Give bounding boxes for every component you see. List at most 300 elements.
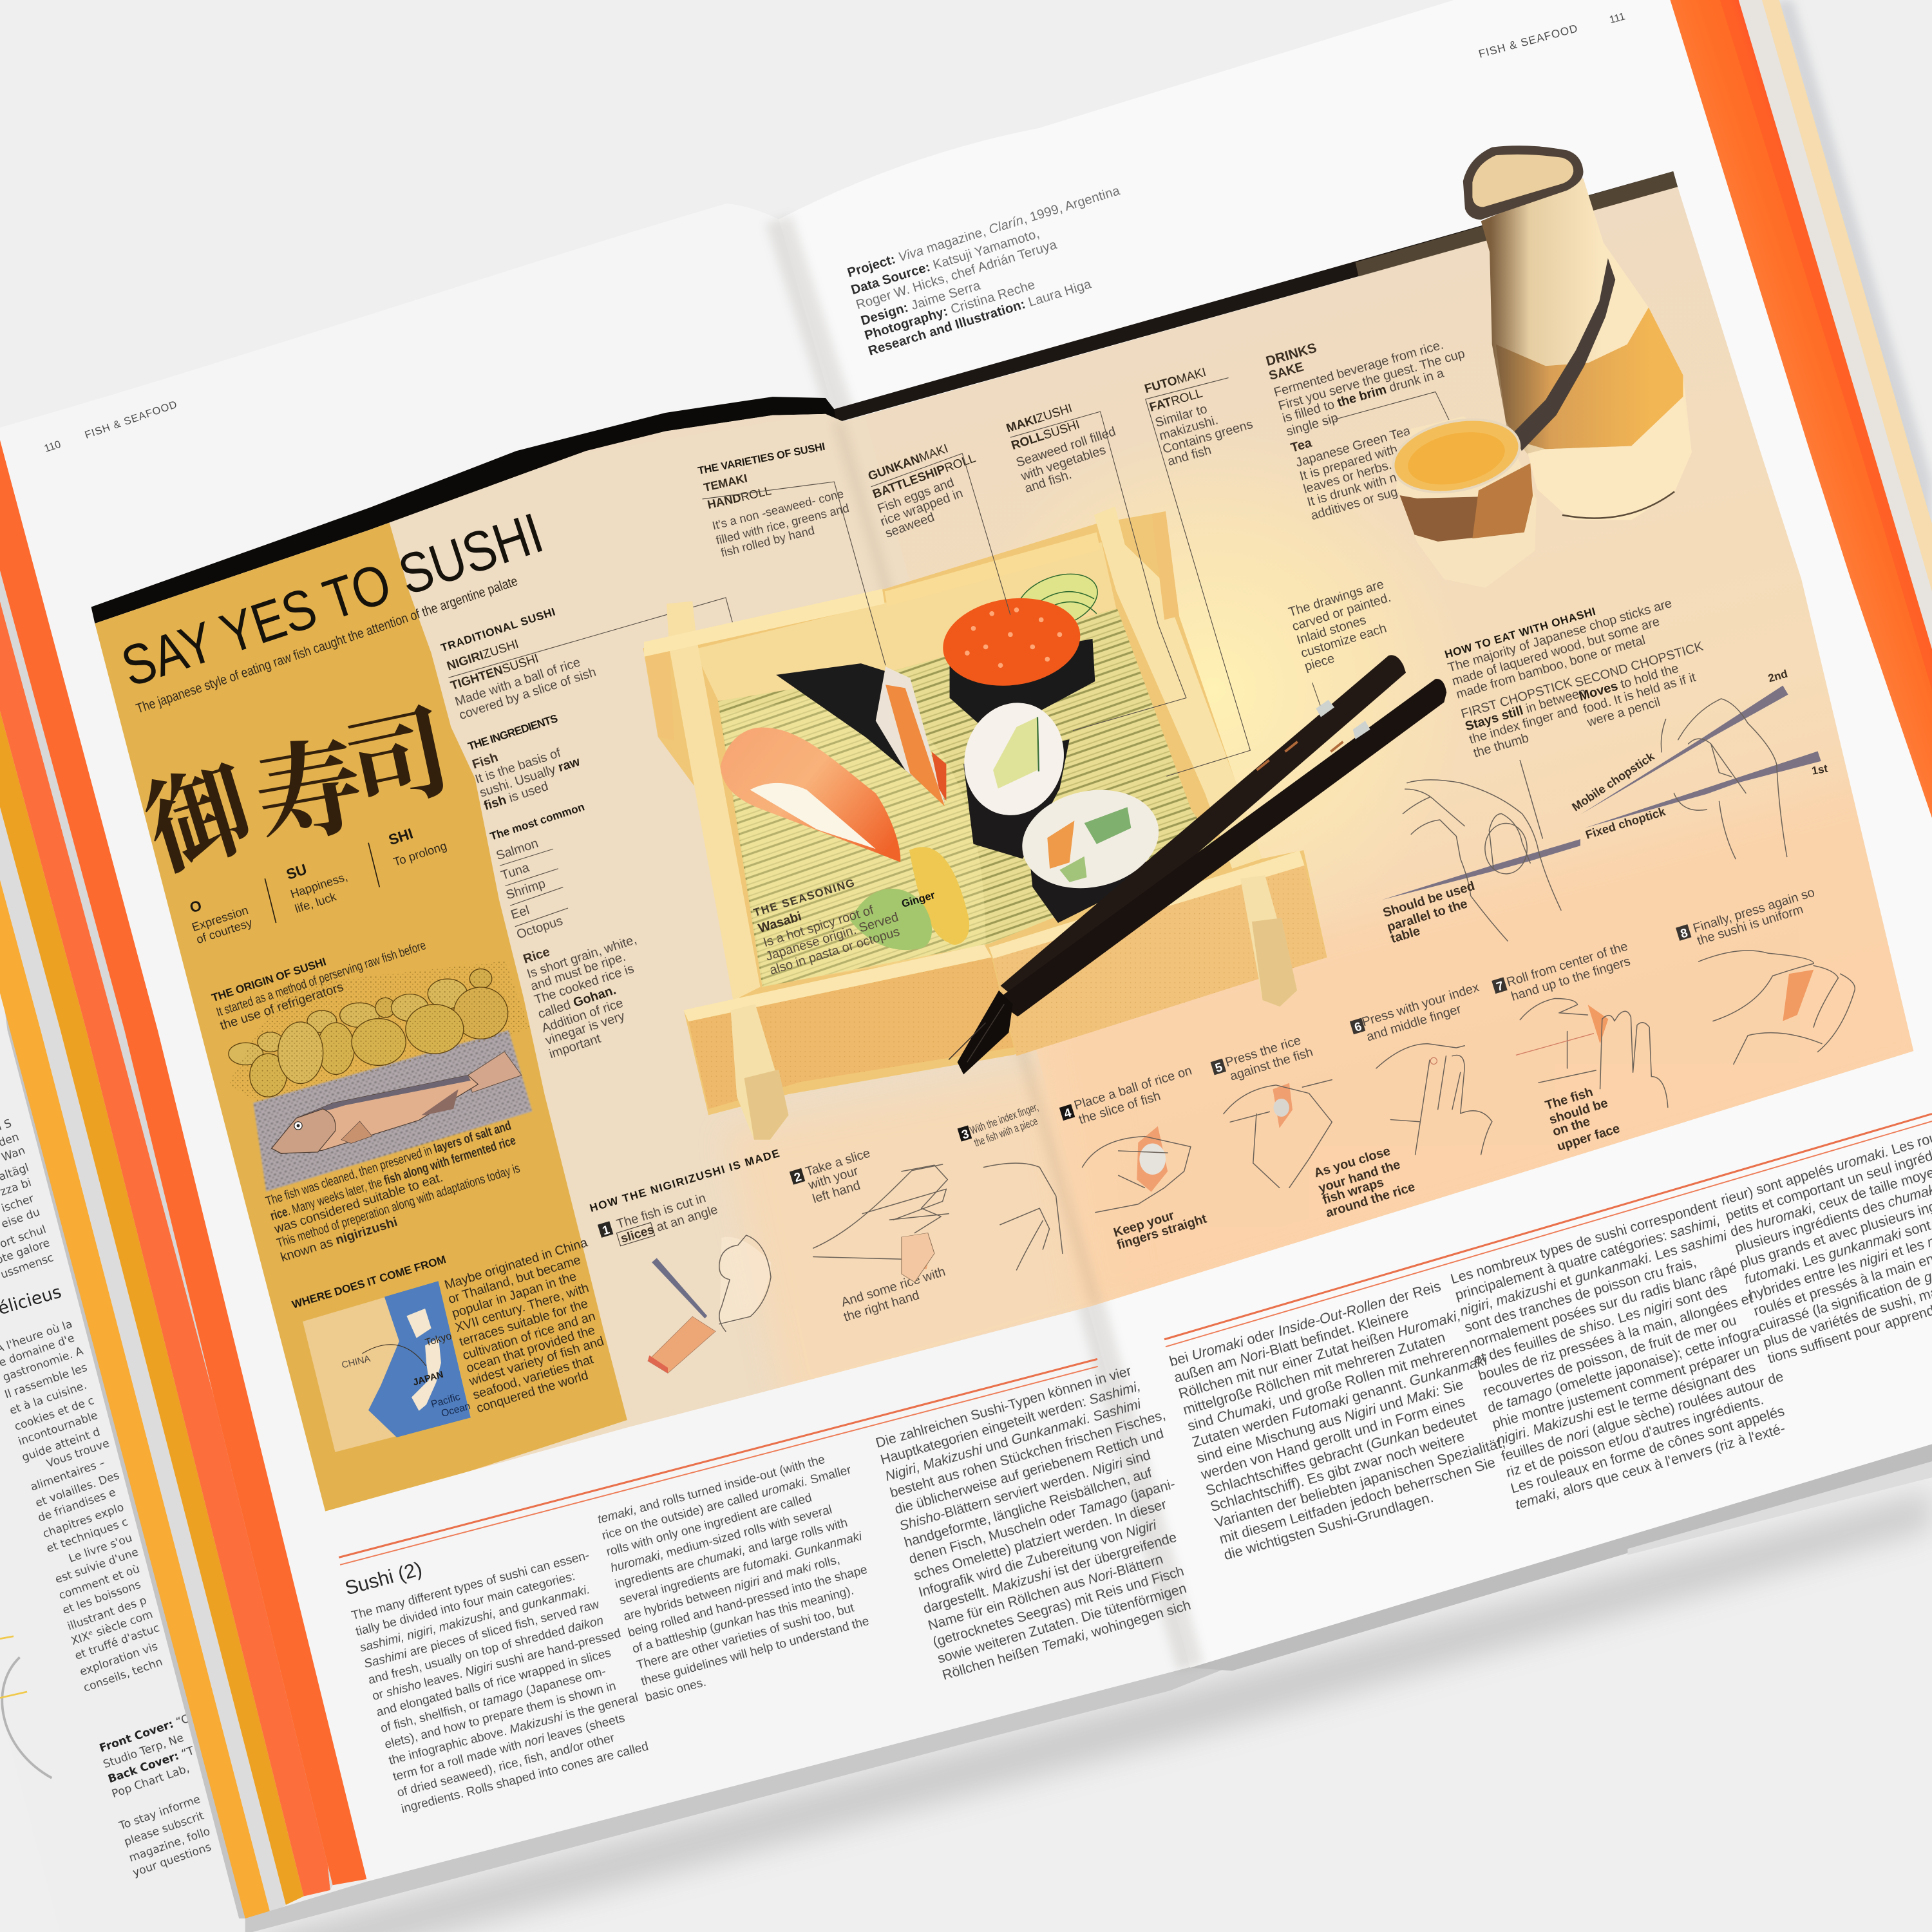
infographic photo background [95,187,1914,1511]
fish preservation paragraph [264,1119,522,1265]
map of Japan [303,1281,471,1452]
gunkan maki with roe [937,564,1105,724]
how to eat with ohashi text: SECOND CHOPSTICK [1573,639,1705,690]
German text column 1: Die zahlreichen Sushi-Typen können in vier [874,1363,1133,1451]
futomaki: Contains greens [1161,417,1255,457]
step 7: upper face [1555,1121,1622,1154]
label O: Expression [190,903,250,934]
underlying page body text: cookies et de c [13,1394,96,1434]
English text column 2: rolls with only one ingredient are called [605,1491,813,1559]
how to eat with ohashi text: the index finger and [1468,702,1580,747]
step 7: The fish [1544,1085,1595,1113]
chopstick labels: parallel to the [1385,896,1469,934]
underlying page top paragraph fragment: ischer [0,1192,36,1215]
German text column 2: Schlachtschiffes gebracht (Gunkan bedeutet [1204,1407,1479,1499]
how to eat with ohashi text: The majority of Japanese chop sticks are [1446,596,1674,675]
kanji SU: 寿 [243,700,374,868]
ingredients column: THE INGREDIENTS [466,712,559,753]
underlying page body text: gastronomie. A [1,1345,85,1384]
right book page [779,0,1932,1668]
step 4: the slice of fish [1077,1089,1162,1127]
fish preservation paragraph: rice. Many weeks later, the fish along with fermented rice [269,1133,518,1224]
underlying page body text: XIXᵉ siècle com [70,1608,155,1648]
origin paragraph: popular in Japan in the [450,1269,578,1321]
kanji O: 御 [126,724,268,897]
step 2: with your [806,1164,860,1193]
chopsticks note [1287,577,1393,707]
tray base [643,511,1327,1115]
English text column 1: ingredients. Rolls shaped into cones are called [400,1739,650,1816]
step 5: As you close [1312,1144,1392,1180]
origin of sushi heading and intro: It started as a method of perserving raw fish before [214,938,428,1019]
fish preservation paragraph: This method of preperation along with adaptations today is [275,1161,522,1251]
futomaki [1143,366,1255,776]
how to eat with ohashi text [1443,596,1705,761]
project credits: Data Source: Katsuji Yamamoto, [849,227,1041,298]
origin paragraph [443,1235,605,1416]
underlying page body text: conseils, techn [82,1656,164,1695]
underlying page top paragraph fragment: eise du [0,1206,42,1231]
chopstick labels: 2nd [1766,667,1789,685]
traditional sushi column: TIGHTENSUSHI [449,652,540,693]
French text column 1: temaki, alors que ceux à l'envers (riz à l'exté- [1513,1420,1787,1513]
gunkanmaki: BATTLESHIPROLL [871,451,978,502]
right page double rule [1164,1114,1932,1347]
label SHI: SHI [386,825,415,848]
sushi tray photo [643,506,1327,1140]
German text column 2: sind Chumaki, und große Rollen mit mehreren [1186,1340,1472,1434]
where does it come from heading: WHERE DOES IT COME FROM [290,1253,448,1311]
step 5: fish wraps [1321,1175,1385,1208]
gunkanmaki: Fish eggs and [876,475,956,516]
futomaki: makizushi. [1158,413,1220,443]
underlying page body text: guide atteint d [20,1426,102,1464]
step 3 [902,1100,1063,1282]
fish [272,1052,522,1153]
step 6 [1350,980,1492,1155]
label SHI: To prolong [392,838,448,869]
project credits: Photography: Cristina Reche [863,278,1037,343]
English text column 1: or shisho leaves. Nigiri sushi are hand-pressed [371,1627,622,1703]
right page running header: 111 [1608,10,1627,26]
French text column 2 [1719,1113,1932,1367]
German text column 2: Zutaten werden Futomaki genannt. Gunkanmaki [1190,1352,1490,1450]
varieties of sushi: temaki: fish rolled by hand [719,523,816,560]
label SHI [386,825,448,869]
origin paragraph: conquered the world [475,1368,590,1416]
chopsticks [949,655,1446,1074]
drinks text block: Fermented beverage from rice. [1273,338,1445,400]
drinks text block: single sip [1285,411,1340,439]
German text column 2: Schlachtschiff). Es gibt zwar noch weitere [1208,1428,1466,1515]
English text column 2: these guidelines will help to understand the [639,1615,871,1689]
German text column 1: Nigiri, Makizushi und Gunkanmaki. Sashimi [884,1396,1143,1484]
English text column 1: of dried seaweed), rice, fish, and/or other [395,1731,616,1800]
French text column 1: boules de riz pressées à la main, allongées et [1476,1290,1755,1384]
wasabi leaf [850,889,932,950]
German text column 1: Hauptkategorien eingeteilt werden: Sashimi, [878,1378,1142,1468]
step 7: 7 [1495,980,1506,994]
French text column 1: nigiri, makizushi et gunkanmaki. Les sashimi [1458,1227,1729,1319]
temaki hand roll [776,663,946,806]
origin paragraph: ocean that provided the [464,1323,597,1376]
futomaki: Similar to [1153,402,1209,430]
chopsticks note: carved or painted. [1291,591,1393,634]
how to eat with ohashi text: Moves to hold the [1577,661,1680,704]
German text column 1 [874,1357,1220,1683]
right page coloured edge stripes [1670,0,1932,818]
map of Japan: Ocean [440,1401,471,1419]
traditional sushi column: Made with a ball of rice [453,655,582,709]
German text column 1: Shisho-Blättern serviert werden. Nigiri sind [898,1447,1152,1534]
step 8: 8 [1679,926,1690,942]
ingredients column: Fish [471,750,500,772]
label SU: SU [284,860,309,883]
drinks text block: It is drunk with no [1305,468,1405,509]
English text column 1: Sashimi are pieces of sliced fish, served raw [363,1598,601,1671]
French text column 1: phie montre justement comment préparer un [1490,1340,1761,1432]
step 2: left hand [811,1179,862,1206]
English text column 1 [350,1546,652,1816]
underlying page cover credits: Front Cover: “C [98,1712,191,1755]
underlying page body text: Vous trouve [45,1437,111,1470]
traditional sushi column [439,598,767,750]
underlying page body text: alimentaires – [29,1457,107,1494]
chopstick labels: Mobile chopstick [1569,749,1657,814]
right page running header: FISH & SEAFOOD [1477,21,1580,61]
nigirizushi steps heading: HOW THE NIGIRIZUSHI IS MADE [588,1146,781,1215]
French text column 1: sont des tranches de poisson cru frais, [1463,1254,1698,1335]
ingredients column: It is the basis of [473,746,563,787]
underlying page body text: et les boissons [61,1578,142,1617]
label SU: Happiness, [289,869,349,901]
underlying page cover credits: Pop Chart Lab, [110,1762,191,1801]
step 1: slices [619,1223,656,1246]
how to eat with ohashi text: HOW TO EAT WITH OHASHI [1443,605,1597,661]
gunkanmaki: GUNKANMAKI [866,442,950,484]
seasoning text block: Japanese origin. Served [764,910,900,964]
drinks text block: DRINKS [1264,341,1318,369]
kanji SHI: 司 [332,670,461,833]
underlying page body text: et à la cuisine. [8,1379,88,1417]
varieties of sushi: temaki: It's a non -seaweed- cone [711,486,845,533]
chopstick labels: table [1389,924,1422,946]
step 6: 6 [1353,1020,1363,1035]
step 5: against the fish [1228,1045,1314,1084]
French text column 1: principalement à quatre catégories: sashimi, [1454,1212,1721,1303]
ingredients column: and must be ripe. [529,950,627,994]
step 7 [1492,940,1668,1154]
step 4: 4 [1063,1106,1074,1121]
futomaki: FUTOMAKI [1143,366,1208,396]
origin paragraph: or Thailand, but became [446,1253,582,1307]
how to eat with ohashi text: Stays still in between [1464,685,1587,734]
sake cup [1387,409,1537,588]
chopsticks note: customize each [1299,621,1388,661]
kanji calligraphy with meanings [126,670,461,946]
step 5: around the rice [1324,1180,1417,1220]
underlying page cover credits: Studio Terp, Ne [102,1732,185,1771]
underlying page body text: chapitres explo [41,1501,126,1540]
underlying page top paragraph fragment: ussmensc [0,1251,55,1282]
drinks text block: leaves or herbs. [1302,458,1393,497]
step 1 [598,1191,771,1373]
subtitle: The japanese style of eating raw fish caught the attention of the argentine palate [135,574,520,717]
origin of sushi heading and intro: the use of refrigerators [218,980,345,1033]
step 8: the sushi is uniform [1696,902,1805,948]
underlying page body text: est suivie d'une [53,1546,140,1586]
origin paragraph: Maybe originated in China [443,1235,590,1293]
origin of sushi heading and intro: THE ORIGIN OF SUSHI [210,955,328,1004]
ingredients column: sushi. Usually raw [478,754,582,800]
label SU: life, luck [293,889,338,916]
German text column 2: Varianten der beliebten japanischen Spezialität, [1213,1434,1507,1531]
traditional sushi column: TRADITIONAL SUSHI [439,605,557,654]
origin paragraph: seafood, varieties that [471,1352,595,1403]
drinks text block: SAKE [1267,360,1305,383]
makizushi [1005,402,1186,731]
origin paragraph: terraces suitable for the [458,1296,590,1349]
French text column 1: feuilles de nori (algue sèche) roulées autour de [1499,1368,1785,1464]
makizushi: ROLLSUSHI [1010,418,1081,453]
German text column 1: Röllchen heißen Temaki, wohingegen sich [940,1597,1193,1683]
German text column 2: bei Uromaki oder Inside-Out-Rollen der Reis [1168,1278,1443,1370]
ingredients column: vinegar is very [544,1009,627,1048]
project credits: Design: Jaime Serra [859,278,983,328]
chopsticks note: Inlaid stones [1295,613,1368,647]
step 4: fingers straight [1115,1211,1209,1253]
bottle brush stroke [1513,258,1615,451]
ingredients column: Rice [522,945,552,967]
ingredients column: Octopus [515,914,565,942]
bottle rim [1463,146,1584,220]
English text column 2: basic ones. [644,1676,708,1705]
French text column 1: et des feuilles de shiso. Les nigiri sont des [1472,1280,1729,1367]
French text column 1 [1448,1191,1799,1513]
chopstick labels: 1st [1811,762,1829,777]
German text column 1: dargestellt. Makizushi ist der übergreifende [922,1530,1179,1616]
ingredients column [466,712,638,1061]
underlying page body text: Le livre s'ou [67,1531,134,1566]
English text column 2: being rolled and hand-pressed into the shape [627,1563,869,1640]
step 1: at an angle [655,1202,719,1235]
traditional sushi column: NIGIRIZUSHI [445,638,520,674]
project credits [846,184,1122,359]
English text column 1: and elongated balls of rice wrapped in slices [375,1646,612,1719]
how to eat with ohashi text: made from bamboo, bone or metal [1455,633,1647,702]
varieties of sushi: temaki: THE VARIETIES OF SUSHI [697,441,826,477]
step 3: the fish with a piece [972,1114,1039,1149]
German text column 1: denen Fisch, Muscheln oder Tamago (japani- [907,1476,1177,1567]
tray left post [667,601,760,1001]
German text column 1: handgeformte, längliche Reisbällchen, auf [902,1464,1153,1550]
step 1: The fish is cut in [615,1191,708,1231]
fish preservation paragraph: The fish was cleaned, then preserved in layers of salt and [264,1119,513,1209]
varieties of sushi: temaki: HANDROLL [706,484,772,511]
step 6: and middle finger [1365,1002,1463,1044]
futomaki roll [1013,778,1168,923]
German text column 1: (getrocknetes Seegras) mit Reis und Fisch [931,1563,1186,1650]
makizushi: Seaweed roll filled [1014,424,1117,470]
infographic black top bar [91,171,1678,623]
map of Japan: JAPAN [412,1370,444,1388]
seasoning text block: Is a hot spicy root of [762,903,876,950]
ingredients column: Tuna [499,860,531,883]
German text column 1: besteht aus rohen Stückchen frischen Fisches, [888,1407,1167,1501]
varieties of sushi: temaki [697,441,886,665]
drinks text block: Tea [1289,436,1314,455]
German text column 2: mit diesem Leitfaden jedoch beherrschen Sie [1217,1454,1497,1547]
origin of sushi heading and intro [210,938,428,1033]
French text column 1: nigiri. Makizushi est le terme désignant des [1495,1359,1757,1448]
underlying page cover credits: please subscrit [122,1810,206,1849]
map of Japan: Pacific [430,1392,462,1410]
step 8: Finally, press again so [1691,886,1816,936]
German text column 1: sowie weiteren Zutaten. Die tütenförmigen [936,1580,1188,1667]
step 4: Place a ball of rice on [1072,1063,1193,1113]
step 3: With the index finger, [969,1100,1040,1137]
ochre left panel [86,521,627,1518]
ingredients column: called Gohan. [536,983,618,1021]
underlying page cover credits: To stay informe [117,1793,202,1833]
pickled ginger [909,847,969,945]
French text column 1: normalement posées sur du radis blanc râpé [1467,1260,1739,1351]
English text column 2: several ingredients are futomaki. Gunkanmaki [618,1530,864,1607]
step 2: And some rice with [840,1265,947,1310]
fish preservation paragraph: known as nigirizushi [279,1215,399,1265]
label SU [284,860,349,916]
English text column 1: The many different types of sushi can essen- [350,1549,591,1623]
drinks text block: First you serve the guest. The cup [1277,346,1466,413]
hand holding second chopstick [1580,686,1821,859]
underlying page top paragraph fragment [0,1117,55,1282]
seasoning text block [752,876,936,978]
English text column 2: rice on the outside) are called uromaki. Smaller [600,1463,853,1543]
nigiri sushi [721,728,900,862]
underlying page cover credits: Back Cover: “T [106,1745,196,1786]
tray right post [1094,506,1262,869]
English text column 2: of a battleship (gunkan has this meaning). [631,1584,855,1656]
English text column 1: of fish, shellfish, or tamago (Japanese om- [379,1665,607,1736]
seasoning text block: Ginger [900,889,936,910]
tray back wall [694,542,1116,701]
left page running header: FISH & SEAFOOD [83,399,179,441]
ingredients column: Shrimp [504,876,547,902]
how to eat with ohashi text: made of laquered wood, but some are [1450,614,1662,688]
underlying book page with French text [0,1119,211,1879]
futomaki: FATROLL [1148,386,1204,415]
German text column 1: die üblicherweise auf geriebenem Rettich und [893,1425,1166,1517]
gunkanmaki: rice wrapped in [878,486,965,529]
left page double rule [339,1359,1098,1565]
chopstick labels: Should be used [1381,879,1477,920]
how to eat with ohashi text: were a pencil [1585,695,1662,730]
makizushi: MAKIZUSHI [1005,402,1074,435]
drinks text block: is filled to the brim drunk in a [1281,366,1446,426]
English text column 1: and fresh, usually on top of shredded daikon [366,1614,605,1687]
ingredients column: The cooked rice is [533,961,636,1007]
step 2: Take a slice [804,1146,872,1179]
underlying page body text [0,1316,164,1695]
drinks text block [1264,338,1466,523]
seasoning text block: THE SEASONING [752,876,856,919]
tray legs [731,1004,788,1140]
English text column 2 [596,1447,896,1705]
drinks text block: Japanese Green Tea [1294,424,1412,470]
map of Japan: Tokyo [424,1330,453,1349]
English text column 2: temaki, and rolls turned inside-out (with the [596,1453,826,1527]
fish preservation paragraph: was considered suitable to eat. [272,1170,444,1236]
left page running header: 110 [43,439,62,455]
makizushi: and fish. [1023,468,1074,496]
ingredients column: The most common [488,800,586,843]
English text column 1: term for a roll made with nori leaves (sheets [392,1711,627,1784]
underlying page cover credits: magazine, follo [128,1825,212,1865]
underlying page body text: Il rassemble les [3,1361,89,1401]
main title: SAY YES TO SUSHI [114,500,551,699]
step 8 [1676,886,1855,1064]
step 6: Press with your index [1360,980,1481,1030]
left book page [0,204,1190,1882]
step 2: the right hand [842,1288,921,1325]
chopstick labels [1381,667,1829,946]
underlying page body text: et techniques c [45,1515,129,1555]
German text column 1: Name für ein Röllchen aus Nori-Blättern [926,1551,1165,1633]
German text column 2: mittelgroße Röllchen mit mehreren Zutaten [1181,1329,1447,1418]
German text column 2 [1167,1271,1521,1563]
underlying page body text: de friandises e [36,1486,118,1525]
coloured page-edge stripes, left side of book [0,440,367,1932]
English text column 2: There are other varieties of sushi too, but [635,1601,856,1672]
origin paragraph: cultivation of rice and an [461,1309,597,1363]
project credits: Roger W. Hicks, chef Adrián Teruya [855,238,1059,312]
French text column 1: recouvertes de poisson, de fruit de mer ou [1481,1312,1738,1400]
gunkanmaki: seaweed [884,510,936,541]
step 7: hand up to the fingers [1510,954,1632,1004]
French text column 1: de tamago (omelette japonaise); cette infogra- [1486,1321,1766,1416]
German text column 1: sches Omelette) platziert werden. In dieser [912,1497,1168,1584]
underlying page top paragraph fragment: Wan [0,1144,27,1164]
ingredients column: Is short grain, white, [526,933,638,981]
underlying page body text: et truffé d'astuc [73,1622,161,1663]
step 5 [1211,1034,1417,1220]
underlying page body text: et volailles. Des [34,1469,121,1510]
English text column 1: elets), and how to prepare them is shown in [383,1680,618,1752]
origin paragraph: XVII century. There, with [453,1281,591,1335]
makizushi: with vegetables [1019,443,1108,484]
English text column 1: the infographic above. Makizushi is the general [388,1690,639,1768]
step 4: Keep your [1112,1208,1176,1240]
step 7: on the [1551,1114,1592,1139]
step 7: Roll from center of the [1505,940,1629,990]
underlying page cover credits: your questions [131,1841,213,1880]
German text column 2: Röllchen mit nur einer Zutat heißen Huromaki, [1177,1307,1463,1402]
drinks text block: It is prepared with [1298,442,1399,484]
underlying page cover credits [98,1712,213,1880]
French text column 1: Les nombreux types de sushi correspondent [1448,1195,1719,1287]
step 5: your hand the [1317,1157,1402,1196]
English text column 1: sashimi, nigiri, makizushi, and gunkanmaki. [359,1583,591,1655]
origin paragraph: widest variety of fish and [467,1334,605,1389]
hand holding first chopstick [1381,761,1580,941]
step 3: 3 [960,1127,971,1142]
step 1: 1 [601,1223,612,1238]
French text column 1: riz et de poisson et/ou d'autres ingrédients. [1504,1391,1765,1481]
ingredients column: fish is used [482,779,550,813]
German text column 2: die wichtigsten Sushi-Grundlagen. [1222,1489,1435,1563]
how to eat with ohashi text: FIRST CHOPSTICK [1459,676,1575,721]
section heading Sushi (2): Sushi (2) [343,1558,424,1599]
